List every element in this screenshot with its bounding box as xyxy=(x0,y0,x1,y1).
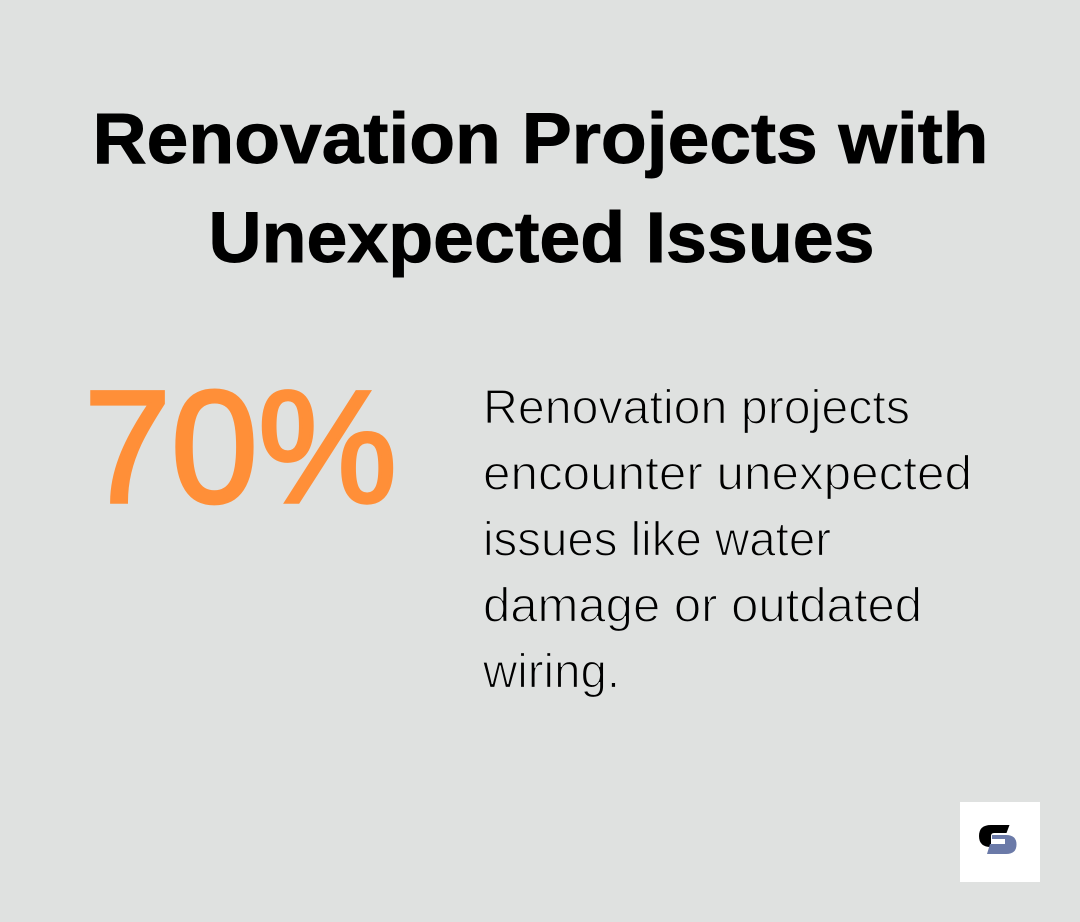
description text xyxy=(482,382,972,698)
big statistic: 70%: 70% xyxy=(84,357,397,536)
description text: Renovation projects xyxy=(483,382,910,434)
title: Renovation Projects with xyxy=(92,100,989,179)
title: Unexpected Issues xyxy=(208,199,874,278)
title xyxy=(92,100,989,278)
logo badge xyxy=(960,802,1040,882)
description text: issues like water xyxy=(483,514,831,566)
description text: damage or outdated xyxy=(483,580,922,632)
icon: logo S mark xyxy=(979,825,1016,854)
description text: encounter unexpected xyxy=(483,448,972,500)
description text: wiring. xyxy=(482,646,620,698)
